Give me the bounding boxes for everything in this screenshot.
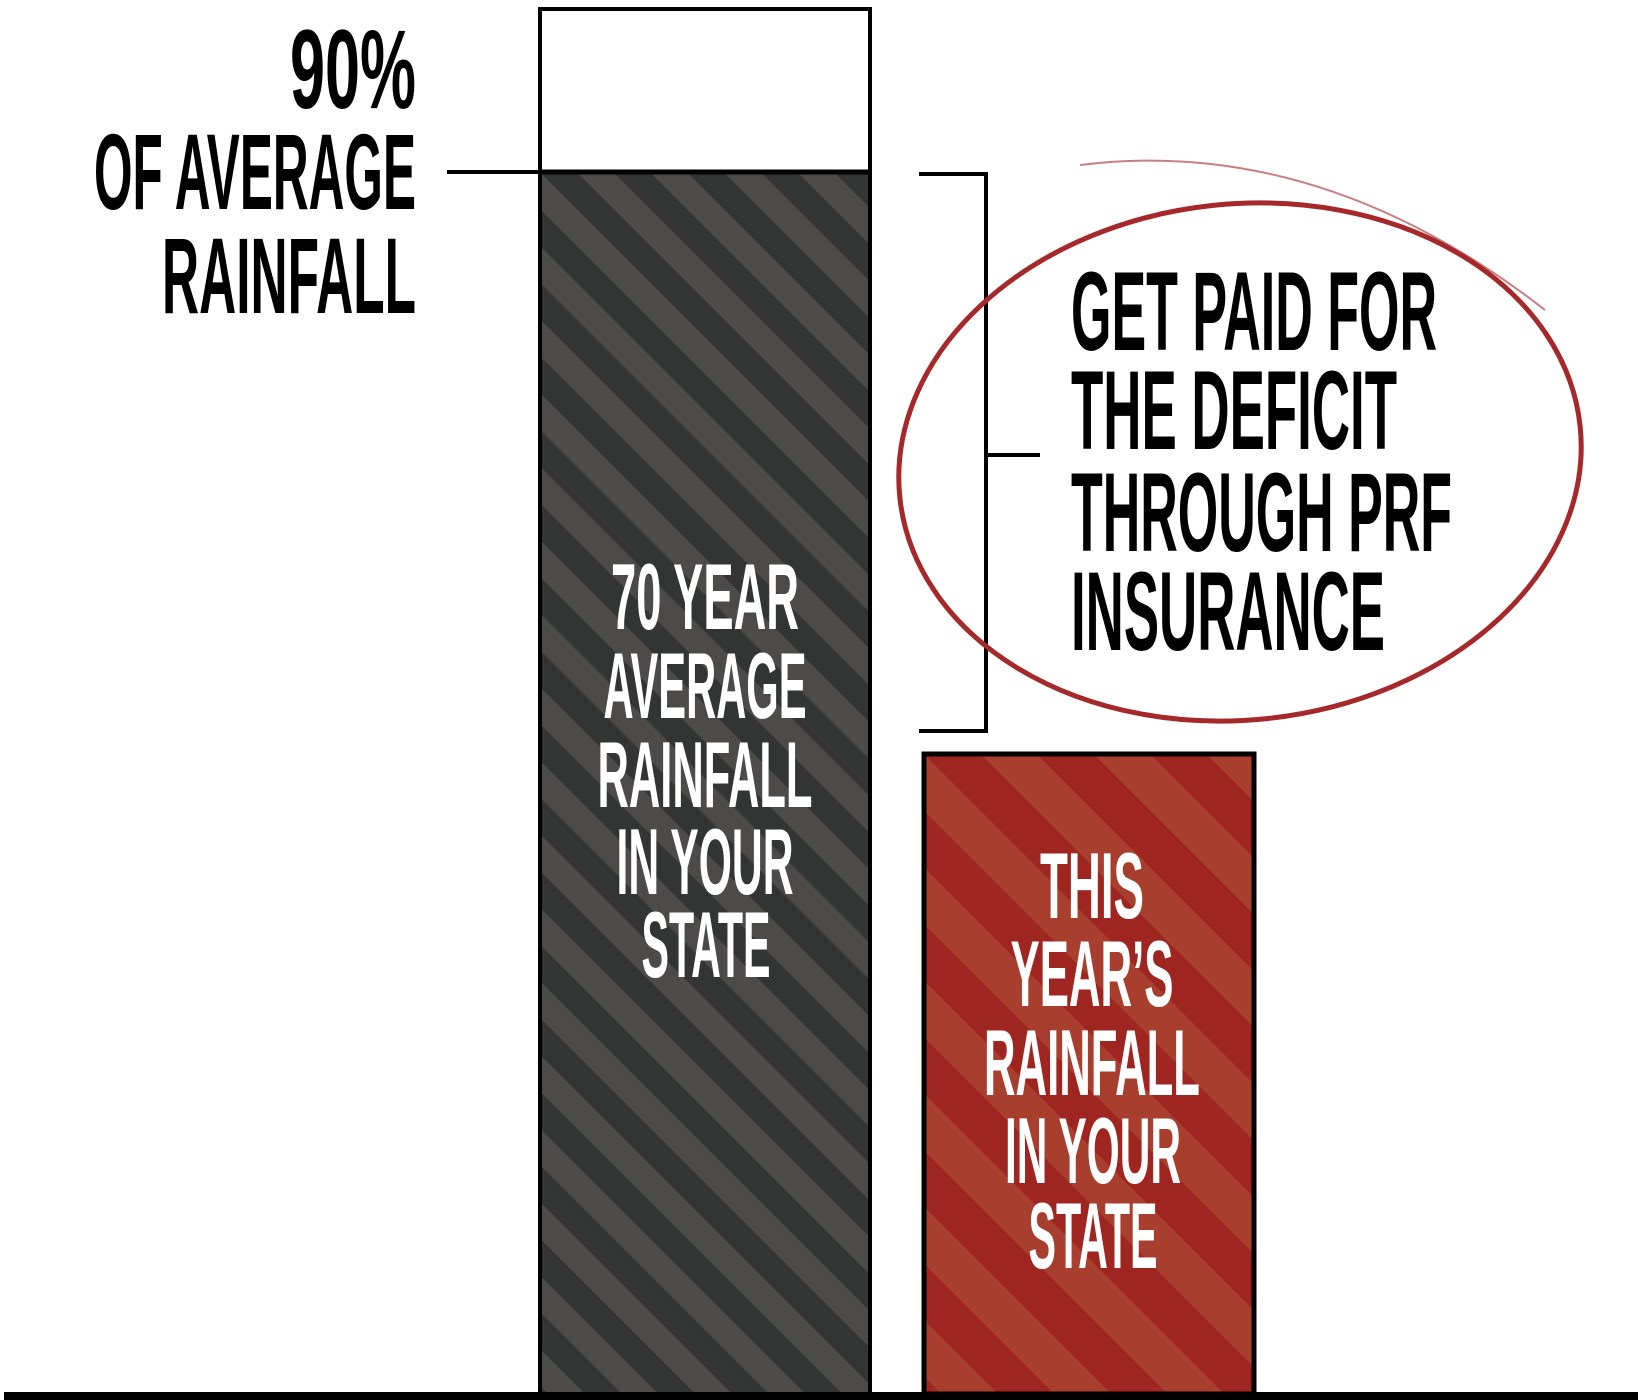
bar: 70 year average: AVERAGE [604, 633, 806, 738]
label: 90% of average rainfall: 90% [290, 7, 416, 132]
bar: this year's rainfall: RAINFALL [984, 1010, 1200, 1115]
bar label: this year's rainfall: THIS [1040, 833, 1144, 938]
bar label: this year's rainfall: IN YOUR [1005, 1098, 1181, 1203]
text: RAINFALL [162, 215, 416, 336]
bar label: 70 year average: 70 YEAR [611, 544, 799, 649]
leader line to 90% mark [447, 170, 540, 174]
bar label: this year's rainfall: STATE [1028, 1183, 1158, 1288]
bar label: this year's rainfall [984, 833, 1200, 1288]
bar label: this year's rainfall: YEAR’S [1010, 921, 1174, 1026]
bar: 70 year average: RAINFALL [598, 722, 812, 827]
bracket: deficit [919, 174, 1040, 731]
bar: this year's rainfall [924, 754, 1254, 1394]
bar label: 70 year average: STATE [642, 892, 770, 997]
bar label: 70 year average: IN YOUR [616, 809, 794, 914]
bar label: 70 year average [598, 544, 812, 997]
baseline [4, 1392, 1638, 1400]
label: 90% of average rainfall [94, 7, 416, 336]
text: OF AVERAGE [94, 111, 416, 232]
circle highlight [873, 161, 1607, 754]
callout text [1071, 249, 1452, 674]
bar: 70 year average [540, 9, 870, 1394]
